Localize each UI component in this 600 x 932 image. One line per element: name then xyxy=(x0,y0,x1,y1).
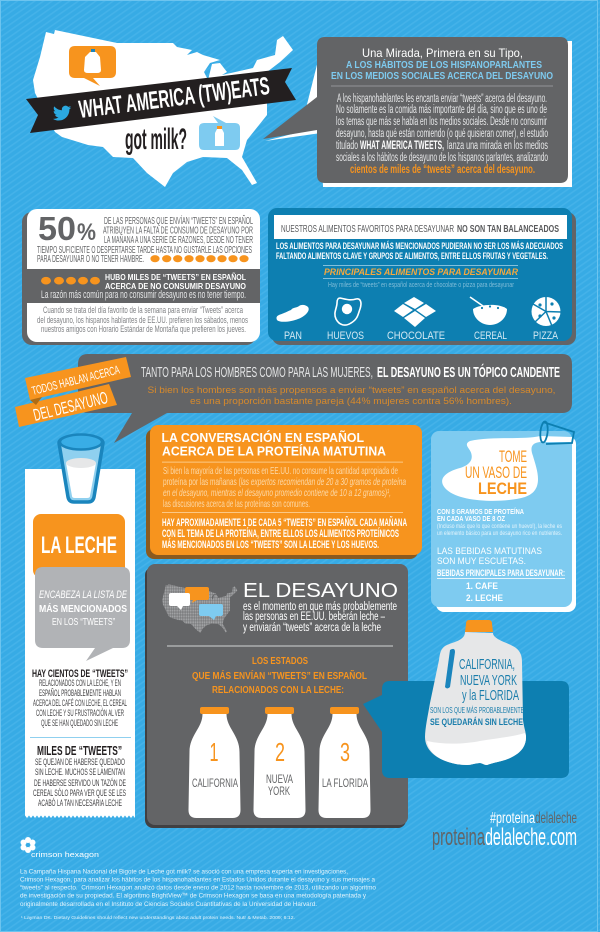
jug text: y la FLORIDA xyxy=(462,687,519,704)
heading: A LOS HÁBITOS DE LOS HISPANOPARLANTES xyxy=(346,58,542,71)
jug text xyxy=(430,656,524,728)
panel heading: EL DESAYUNO xyxy=(243,580,398,602)
footer text xyxy=(20,868,376,921)
hundreds of tweets text xyxy=(32,668,128,728)
food labels: CEREAL xyxy=(474,330,507,342)
bottle: California xyxy=(188,707,240,818)
bottle: Nueva York: 2 xyxy=(275,737,285,767)
panel text: Si bien los hombres son más propensos a enviar “tweets” en español acerca del desayuno, xyxy=(148,385,556,396)
panel: milk column xyxy=(25,434,135,818)
hundreds of tweets text: QUE SE HAN QUEDADO SIN LECHE xyxy=(41,718,118,728)
jug text: SE QUEDARÁN SIN LECHE xyxy=(430,717,523,728)
bottle: Nueva York: YORK xyxy=(268,784,290,798)
website and hashtag xyxy=(432,810,577,851)
panel heading: LECHE xyxy=(478,479,527,498)
panel text: es una proporción bastante pareja (44% mujeres contra 56% hombres). xyxy=(190,396,512,407)
grey speech bubble: EN LOS “TWEETS” xyxy=(52,617,115,628)
icon: cereal bowl xyxy=(470,297,507,325)
stat description: PARA DESAYUNAR O NO TENER HAMBRE. xyxy=(37,254,144,265)
header: US map with banner xyxy=(26,30,296,187)
grey band: not eating breakfast: La razón más común para no consumir desayuno es no tener tiempo. xyxy=(41,289,246,301)
dotted map with bubbles xyxy=(162,584,237,633)
hundreds of tweets text: HAY CIENTOS DE “TWEETS” xyxy=(32,668,128,680)
thousands of tweets text: MILES DE “TWEETS” xyxy=(37,744,122,758)
protein note: un elemento básico para un desayuno rico en nutrientes. xyxy=(437,530,562,537)
protein paragraph: en el desayuno, mientras el desayuno promedio contiene de 10 a 12 gramos)¹, xyxy=(163,487,391,499)
stat 50%: % xyxy=(77,219,96,246)
food labels xyxy=(284,330,559,342)
protein highlight: CON EL TEMA DE LA PROTEÍNA, ENTRE ELLOS LOS ALIMENTOS PROTEÍNICOS xyxy=(162,527,399,540)
panel text: es el momento en que más probablemente xyxy=(243,601,397,613)
stat 50% xyxy=(38,210,96,247)
footer text: de investigación de su propiedad. El algoritmo BrightView™ de Crimson Hexagon se basa en una metodología patentada y xyxy=(20,892,367,900)
icon: bread xyxy=(277,305,309,322)
thousands of tweets text: SE QUEJAN DE HABERSE QUEDADO xyxy=(35,757,125,768)
heading: Una Mirada, Primera en su Tipo, xyxy=(362,46,523,60)
bottle: Nueva York xyxy=(254,707,306,818)
bottle: La Florida: 3 xyxy=(340,737,350,767)
thousands of tweets text xyxy=(33,744,126,809)
hundreds of tweets text: RELACIONADOS CON LA LECHE, Y EN xyxy=(39,678,121,688)
orange ribbons: DEL DESAYUNO xyxy=(31,388,110,425)
panel heading xyxy=(162,430,386,459)
logo: crimson hexagon xyxy=(20,837,99,859)
panel heading: LA CONVERSACIÓN EN ESPAÑOL xyxy=(162,430,364,445)
states heading: LOS ESTADOS xyxy=(252,655,308,667)
footer text: “tweets” al respecto. Crimson Hexagon analizó datos desde enero de 2012 hasta noviembre de 2013, utilizando un algoritmo xyxy=(20,884,376,892)
panel heading: NUESTROS ALIMENTOS FAVORITOS PARA DESAYUNAR xyxy=(281,223,454,235)
panel text xyxy=(148,385,556,407)
stat 50%: 50 xyxy=(38,210,76,247)
footer text: La Campaña Hispana Nacional del Bigote de Leche got milk? se asoció con una empresa experta en investigaciones, xyxy=(20,868,348,876)
orange label: LA LECHE xyxy=(41,532,117,559)
orange label xyxy=(33,514,125,578)
hundreds of tweets text: ESPAÑOL PROBABLEMENTE HABLAN xyxy=(39,688,121,698)
drinks list xyxy=(437,546,565,603)
subheading xyxy=(323,265,518,289)
orange speech bubble with jug xyxy=(69,46,116,86)
panel: milk column: ACERCA DEL CAFÉ CON LECHE, EL CEREAL xyxy=(33,698,127,708)
panel: drink a glass of milk xyxy=(431,421,576,612)
thousands of tweets text: DE HABERSE SERVIDO UN TAZÓN DE xyxy=(34,778,126,789)
protein highlight: MÁS MENCIONADOS EN LOS “TWEETS” SON LA LECHE Y LOS HUEVOS. xyxy=(162,538,379,551)
orange tweet dots xyxy=(150,255,249,262)
panel: 50 percent xyxy=(22,209,260,345)
icon: glass of milk xyxy=(59,434,103,502)
panel text: y enviarán “tweets” acerca de la leche xyxy=(243,622,381,634)
protein note: EN CADA VASO DE 8 OZ xyxy=(437,514,505,523)
panel heading: TANTO PARA LOS HOMBRES COMO PARA LAS MUJERES, xyxy=(141,364,373,381)
thousands of tweets text: ACABÓ LA TAN NECESARIA LECHE xyxy=(38,798,122,809)
bottle: La Florida: LA FLORIDA xyxy=(322,776,368,790)
panel heading: NO SON TAN BALANCEADOS xyxy=(457,224,559,235)
protein note: CON 8 GRAMOS DE PROTEÍNA xyxy=(437,507,524,516)
panel text xyxy=(243,601,397,634)
grey speech bubble: ENCABEZA LA LISTA DE xyxy=(39,589,127,601)
heading: EN LOS MEDIOS SOCIALES ACERCA DEL DESAYUNO xyxy=(331,70,553,82)
protein highlight: HAY APROXIMADAMENTE 1 DE CADA 5 “TWEETS” EN ESPAÑOL CADA MAÑANA xyxy=(162,516,407,529)
thousands of tweets text: SIN LECHE. MUCHOS SE LAMENTAN xyxy=(35,767,125,778)
jug text: NUEVA YORK xyxy=(460,672,517,689)
panel heading: UN VASO DE xyxy=(465,463,527,482)
panel text: las personas en EE.UU. beberán leche – xyxy=(243,611,385,623)
milk splash xyxy=(442,436,572,501)
black ribbon banner xyxy=(26,68,296,133)
panel: favourite breakfast foods xyxy=(268,208,576,345)
jug text: SON LOS QUE MÁS PROBABLEMENTE xyxy=(430,705,524,715)
panel: milk jug callout xyxy=(363,620,569,778)
icon: twitter bird xyxy=(53,106,71,121)
bottle: La Florida xyxy=(318,707,370,818)
food labels: PIZZA xyxy=(533,330,559,342)
states heading: QUE MÁS ENVÍAN “TWEETS” EN ESPAÑOL xyxy=(192,669,367,682)
grey speech bubble xyxy=(35,567,130,661)
stat description: LA MAÑANA A UNA SERIE DE RAZONES, DESDE NO TENER xyxy=(104,233,253,246)
drinks list: SON MUY ESCUETAS. xyxy=(437,556,526,566)
orange ribbons xyxy=(15,357,131,427)
orange ribbons: TODOS HABLAN ACERCA xyxy=(30,363,121,398)
protein paragraph: Si bien la mayoría de las personas en EE.UU. no consume la cantidad apropiada de xyxy=(163,465,398,477)
footer text: Crimson Hexagon, para analizar los hábitos de los hispanohablantes en Estados Unidos durante el desayuno y sus mensajes a xyxy=(20,876,375,884)
protein note: (Incluso más que lo que contiene un huevo!), la leche es xyxy=(437,523,563,530)
drinks list: 1. CAFE xyxy=(466,581,498,591)
stat description: TIEMPO SUFICIENTE O DESPERTARSE TARDE HASTA NO GUSTARLE LAS OPCIONES xyxy=(37,245,252,256)
header: US map with banner: got milk? xyxy=(125,123,187,156)
protein highlight xyxy=(162,516,407,551)
states heading xyxy=(192,655,367,696)
logo: crimson hexagon: crimson hexagon xyxy=(31,852,99,859)
bottle: California: CALIFORNIA xyxy=(192,776,238,790)
grey band: not eating breakfast: ACERCA DE NO CONSUMIR DESAYUNO xyxy=(105,282,246,291)
drinks list: LAS BEBIDAS MATUTINAS xyxy=(437,546,542,556)
footer text: originalmente desarrollada en el Instituto de Ciencias Sociales Cuantitativas de la Universidad de Harvard. xyxy=(20,901,317,908)
stat description xyxy=(37,214,253,265)
stat description: DE LAS PERSONAS QUE ENVÍAN “TWEETS” EN ESPAÑOL xyxy=(104,214,253,227)
panel: breakfast states xyxy=(145,564,408,828)
subheading: Hay miles de “tweets” en español acerca de chocolate o pizza para desayunar xyxy=(328,280,514,289)
protein paragraph: proteína por las mañanas (las expertos recomiendan de 20 a 30 gramos de proteína xyxy=(163,476,406,488)
icon: egg xyxy=(335,298,361,325)
panel heading: TOME xyxy=(499,447,527,466)
food labels: PAN xyxy=(284,330,302,342)
title: WHAT AMERICA (TW)EATS xyxy=(77,72,271,124)
subheading: PRINCIPALES ALIMENTOS PARA DESAYUNAR xyxy=(324,267,518,278)
website and hashtag: #proteina xyxy=(490,810,535,827)
states heading: RELACIONADOS CON LA LECHE: xyxy=(212,684,344,696)
protein paragraph: las discusiones acerca de las proteínas son comunes. xyxy=(163,498,310,510)
panel heading xyxy=(274,215,567,239)
bottle: Nueva York: NUEVA xyxy=(266,772,293,786)
intro text block xyxy=(336,93,548,176)
intro text block: WHAT AMERICA TWEETS, xyxy=(360,140,444,152)
stat description: ATRIBUYEN LA FALTA DE CONSUMO DE DESAYUNO POR xyxy=(103,226,253,236)
grey speech bubble: MÁS MENCIONADOS xyxy=(39,602,127,615)
panel: intro callout xyxy=(263,37,572,187)
icon: chocolate xyxy=(394,297,436,327)
jug text: CALIFORNIA, xyxy=(459,656,515,673)
food labels: HUEVOS xyxy=(327,330,364,342)
icon: tipped glass xyxy=(539,421,574,444)
blue speech bubble with bottle xyxy=(199,116,240,150)
panel: protein conversation xyxy=(146,425,422,559)
day of week text: nuestros amigos con Horario Estándar de Montaña que prefieren los jueves. xyxy=(41,324,246,335)
intro text block: titulado xyxy=(336,140,358,152)
hundreds of tweets text: CON LECHE Y SU FRUSTRACIÓN AL VER xyxy=(36,708,124,718)
panel heading xyxy=(465,447,527,498)
website and hashtag: proteina xyxy=(432,824,485,851)
panel heading: ACERCA DE LA PROTEÍNA MATUTINA xyxy=(162,444,386,459)
panel: everyone talks about breakfast xyxy=(15,354,572,443)
protein note xyxy=(437,507,563,537)
food labels: CHOCOLATE xyxy=(387,330,445,342)
panel description xyxy=(276,241,563,262)
thousands of tweets text: CEREAL SÓLO PARA VER QUE SE LES xyxy=(33,788,126,799)
grey band: not eating breakfast xyxy=(27,269,260,303)
icon: pizza xyxy=(532,297,561,326)
protein paragraph xyxy=(163,465,406,510)
grey band: not eating breakfast: HUBO MILES DE “TWEETS” EN ESPAÑOL xyxy=(105,273,246,282)
heading xyxy=(331,46,553,82)
footer text: ¹ Layman DK. Dietary Guidelines should reflect new understandings about adult protein needs. Nutr & Metab. 2009; 6:12. xyxy=(21,915,295,921)
bottle: California: 1 xyxy=(210,737,218,767)
icon: milk jug xyxy=(425,620,526,765)
US map silhouette xyxy=(33,30,293,187)
day of week text: del desayuno, los hispanos hablantes de EE.UU. prefieren los sábados, menos xyxy=(37,315,248,326)
day of week text xyxy=(37,305,248,335)
day of week text: Cuando se trata del día favorito de la semana para enviar “Tweets” acerca xyxy=(43,305,243,316)
drinks list: 2. LECHE xyxy=(466,593,503,603)
